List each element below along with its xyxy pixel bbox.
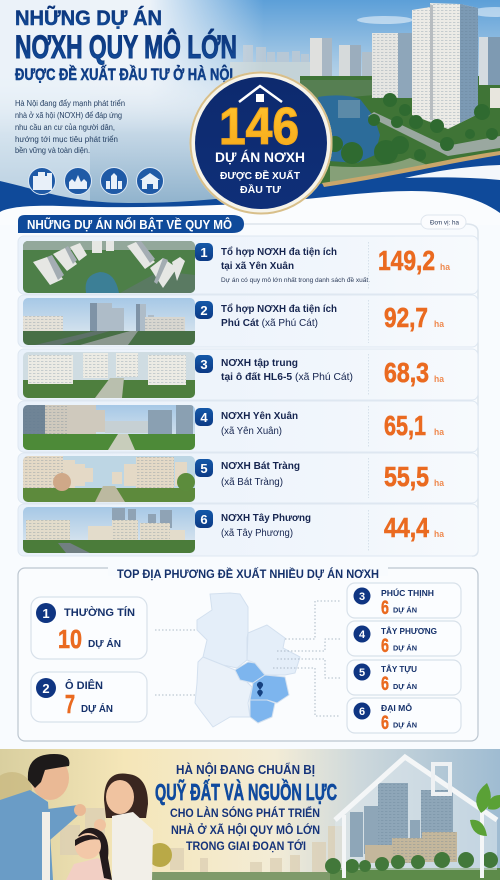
card: Tây Tựu: 6 — [381, 674, 389, 695]
footer text: QUỸ ĐẤT VÀ NGUỒN LỰC — [155, 778, 337, 805]
header illustration: city and lake — [0, 0, 500, 215]
intro text: nhà ở xã hội (NƠXH) để đáp ứng — [15, 110, 122, 120]
text 5 — [221, 460, 300, 488]
title — [15, 6, 237, 84]
text 1: Dự án có quy mô lớn nhất trong danh sách đề xuất. — [221, 275, 370, 284]
icon: community — [100, 168, 128, 194]
card: Tây Tựu: TÂY TỰU — [381, 663, 417, 674]
text 1: Tổ hợp NƠXH đa tiện ích — [221, 246, 337, 258]
intro text: Hà Nội đang đẩy mạnh phát triển — [15, 98, 125, 108]
badge 4 — [195, 408, 213, 426]
connector lines — [155, 601, 340, 716]
text 3 — [221, 357, 353, 383]
icon: neighbourhood — [64, 168, 92, 194]
map pins — [257, 682, 263, 697]
text 3: NƠXH tập trung — [221, 357, 298, 369]
intro text — [15, 98, 125, 155]
card: Thường Tín — [31, 597, 147, 659]
text 3: tại ô đất HL6-5 (xã Phú Cát) — [221, 371, 353, 383]
card: Tây Phương: 4 — [359, 629, 366, 641]
badge: 146 projects: ĐẦU TƯ — [240, 183, 281, 196]
badge 3: 3 — [200, 357, 208, 372]
card: Tây Phương: 6 — [381, 636, 389, 657]
card: Đại Mỗ: ĐẠI MỖ — [381, 702, 412, 713]
house outline and towers — [325, 757, 498, 878]
card: Phúc Thịnh: PHÚC THỊNH — [381, 587, 434, 598]
card: Ô Diên: DỰ ÁN — [81, 702, 113, 715]
card: Thường Tín: DỰ ÁN — [88, 637, 121, 650]
map — [195, 593, 300, 727]
big number: 146 — [219, 98, 299, 156]
badge 6 — [195, 510, 213, 528]
badge: 146 projects: ĐƯỢC ĐỀ XUẤT — [220, 169, 301, 182]
row 1 image — [23, 241, 195, 293]
text 6: (xã Tây Phương) — [221, 528, 293, 539]
card: Đại Mỗ: 6 — [359, 706, 365, 718]
value 5: ha — [434, 478, 445, 488]
footer text: NHÀ Ở XÃ HỘI QUY MÔ LỚN — [171, 822, 320, 837]
unit label — [421, 215, 466, 229]
text 4: NƠXH Yên Xuân — [221, 410, 298, 422]
card: Phúc Thịnh: 3 — [359, 591, 365, 603]
value 6: 44,4 — [384, 512, 429, 543]
row 1 — [18, 236, 478, 294]
intro text: bền vững và toàn diện. — [15, 145, 90, 155]
card: Phúc Thịnh: 6 — [381, 598, 389, 619]
card: Đại Mỗ: 6 — [381, 713, 389, 734]
card: Ô Diên: 2 — [42, 681, 50, 696]
panel: top localities — [18, 562, 478, 741]
unit label: Đơn vị: ha — [430, 220, 459, 226]
text 6: NƠXH Tây Phương — [221, 512, 311, 524]
child — [66, 828, 112, 880]
footer banner illustration — [0, 749, 500, 880]
row 4 image — [23, 405, 195, 450]
badge: 146 projects: DỰ ÁN NƠXH — [215, 149, 305, 165]
woman — [94, 774, 153, 880]
text 6 — [221, 512, 311, 539]
people — [0, 754, 153, 880]
distant city — [60, 808, 342, 873]
value 1: 149,2 — [378, 245, 435, 276]
badge 1 — [195, 243, 213, 261]
value 2: 92,7 — [384, 302, 428, 333]
row 3 — [18, 349, 478, 400]
row 3 image — [23, 352, 195, 398]
card: Phúc Thịnh: DỰ ÁN — [393, 606, 417, 614]
footer text: CHO LÀN SÓNG PHÁT TRIỂN — [170, 805, 320, 820]
icon: roof — [239, 86, 282, 102]
panel heading: TOP ĐỊA PHƯƠNG ĐỀ XUẤT NHIỀU DỰ ÁN NƠXH — [117, 568, 379, 581]
title: NHỮNG DỰ ÁN — [15, 6, 162, 30]
badge 5 — [195, 459, 213, 477]
badge 6: 6 — [200, 512, 208, 527]
badge 2 — [195, 301, 213, 319]
title: ĐƯỢC ĐỀ XUẤT ĐẦU TƯ Ở HÀ NỘI — [15, 65, 233, 84]
footer text: HÀ NỘI ĐANG CHUẨN BỊ — [176, 762, 315, 777]
value 3: 68,3 — [384, 357, 429, 388]
footer text: TRONG GIAI ĐOẠN TỚI — [186, 838, 306, 853]
title: NƠXH QUY MÔ LỚN — [15, 29, 237, 65]
badge: 146 projects — [190, 72, 332, 214]
text 2 — [221, 303, 337, 329]
badge 2: 2 — [200, 303, 208, 318]
text 2: Tổ hợp NƠXH đa tiện ích — [221, 303, 337, 315]
badge 1: 1 — [200, 245, 208, 260]
value 3: ha — [434, 374, 445, 384]
header wave — [0, 151, 500, 225]
row 5 — [18, 453, 478, 503]
card: Thường Tín: 10 — [58, 624, 82, 654]
card: Tây Tựu: 5 — [359, 667, 365, 679]
text 5: (xã Bát Tràng) — [221, 477, 283, 488]
card: Đại Mỗ — [347, 698, 461, 734]
section heading: NHỮNG DỰ ÁN NỔI BẬT VỀ QUY MÔ — [27, 217, 232, 232]
value 4: ha — [434, 427, 445, 437]
card: Tây Tựu: DỰ ÁN — [393, 682, 417, 691]
text 2: Phú Cát (xã Phú Cát) — [221, 317, 318, 329]
card: Tây Phương: DỰ ÁN — [393, 644, 417, 652]
card: Ô Diên: 7 — [65, 689, 75, 719]
value 1: ha — [440, 262, 451, 272]
card: Ô Diên: Ô DIÊN — [65, 679, 103, 692]
panel: top projects by scale — [18, 215, 478, 556]
card: Tây Phương: TÂY PHƯƠNG — [381, 625, 437, 636]
row 4 — [18, 401, 478, 452]
man — [0, 754, 86, 880]
text 4: (xã Yên Xuân) — [221, 426, 282, 437]
row 6 image — [23, 507, 195, 553]
text 4 — [221, 410, 298, 437]
badge 5: 5 — [200, 461, 208, 476]
row 6 — [18, 504, 478, 556]
text 1 — [221, 246, 370, 284]
card: Tây Tựu — [347, 660, 461, 695]
card: Thường Tín: THƯỜNG TÍN — [64, 606, 135, 619]
icon row — [28, 168, 164, 194]
value 5: 55,5 — [384, 461, 429, 492]
value 4: 65,1 — [384, 410, 426, 441]
row 2 — [18, 295, 478, 347]
badge 3 — [195, 355, 213, 373]
plant — [470, 783, 500, 836]
row 2 image — [23, 298, 195, 345]
icon: buildings — [28, 168, 56, 194]
intro text: hướng tới mục tiêu phát triển — [15, 134, 118, 144]
intro text: nhu cầu an cư của người dân, — [15, 122, 115, 132]
text 5: NƠXH Bát Tràng — [221, 460, 300, 472]
card: Đại Mỗ: DỰ ÁN — [393, 720, 417, 730]
row 5 image — [23, 456, 195, 502]
value 6: ha — [434, 529, 445, 539]
icon: house — [136, 168, 164, 194]
value 2: ha — [434, 319, 445, 329]
card: Ô Diên — [31, 672, 147, 722]
card: Phúc Thịnh — [347, 583, 461, 619]
card: Thường Tín: 1 — [42, 606, 50, 621]
text 1: tại xã Yên Xuân — [221, 260, 294, 272]
footer text — [155, 762, 337, 853]
badge 4: 4 — [200, 410, 208, 425]
card: Tây Phương — [347, 621, 461, 657]
